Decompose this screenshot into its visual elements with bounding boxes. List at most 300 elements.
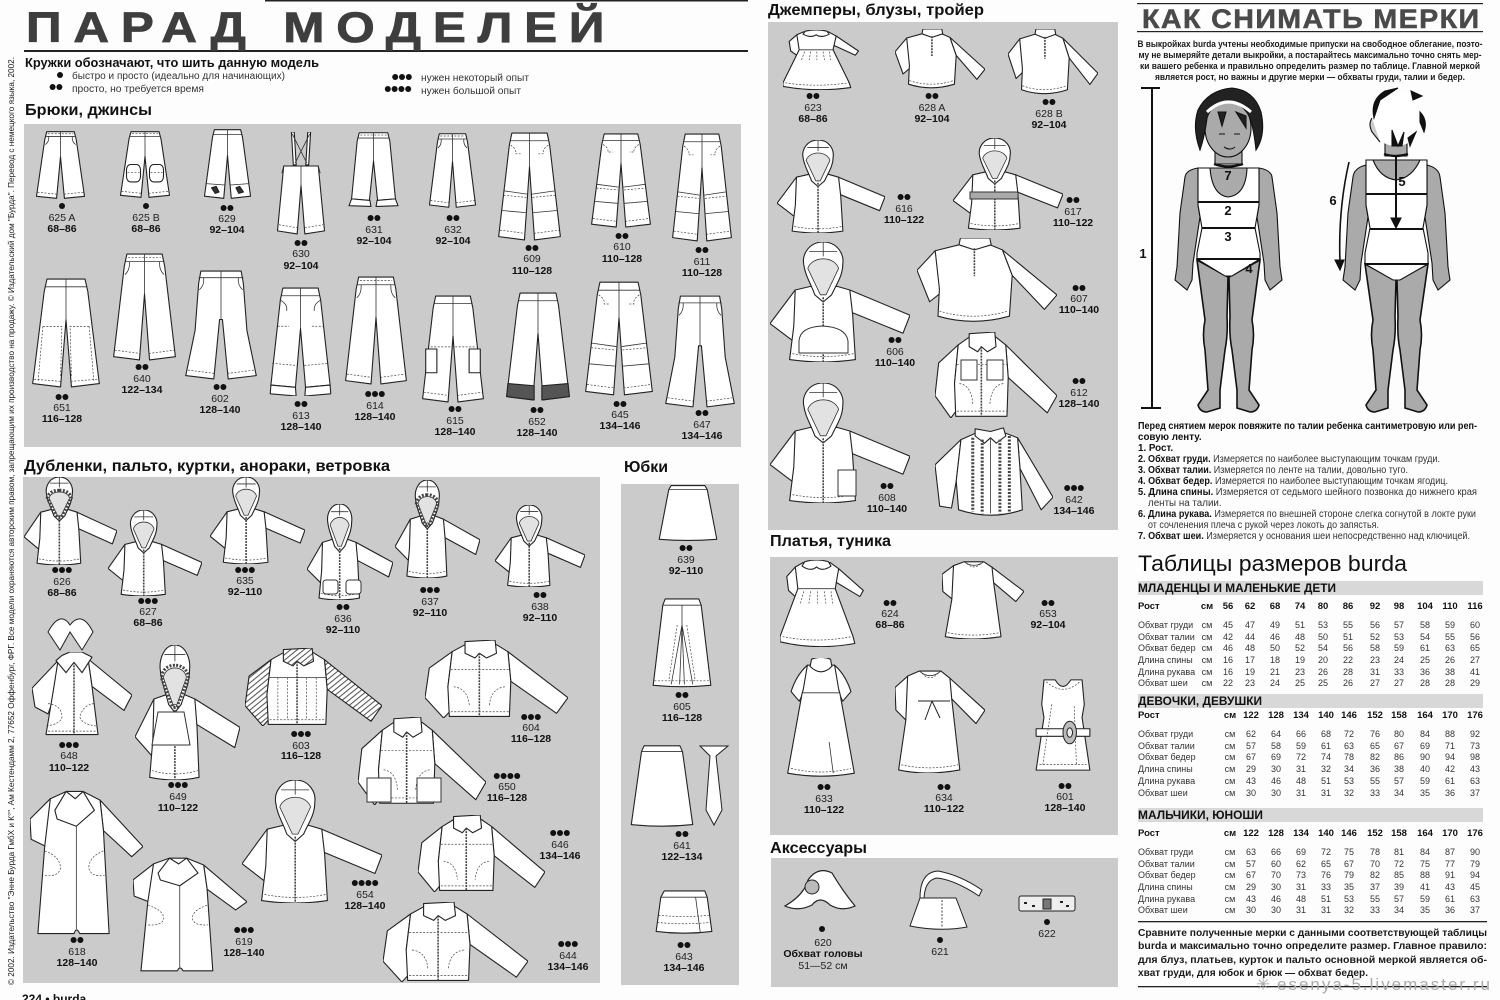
table: boys: 82 — [1370, 870, 1380, 880]
garment 608: 608 — [878, 492, 896, 504]
garment 631 — [349, 133, 398, 247]
measuring instructions: 5. Длина спины. Измеряется от седьмого шейного позвонка до нижнего края — [1138, 487, 1477, 498]
closing note — [1138, 921, 1488, 987]
table: boys: 77 — [1445, 859, 1455, 869]
table: infants and small children: 27 — [1394, 678, 1404, 688]
table: infants and small children: 26 — [1318, 667, 1328, 677]
garment 628 A: 92–104 — [914, 113, 950, 125]
watermark: esenya-5.livemaster.ru — [1277, 975, 1490, 994]
garment 628 B: 628 B — [1035, 108, 1063, 120]
table: girls: Рост — [1138, 710, 1160, 721]
garment 604 — [425, 640, 568, 745]
table: girls: 152 — [1367, 710, 1383, 721]
garment 625 A: 68–86 — [47, 223, 77, 235]
table: infants and small children: 53 — [1394, 632, 1404, 642]
table: girls: 66 — [1296, 729, 1306, 739]
table: girls: Длина спины — [1138, 764, 1193, 774]
garment 605 — [653, 599, 711, 724]
garment 652: 128–140 — [517, 427, 558, 439]
garment 618: 618 — [68, 946, 86, 958]
table: girls: 67 — [1394, 741, 1404, 751]
garment 631: 92–104 — [356, 235, 392, 247]
table: boys: 70 — [1271, 870, 1281, 880]
garment 608: 110–140 — [867, 503, 907, 515]
garment 623 — [783, 30, 858, 125]
table: boys: 78 — [1370, 847, 1380, 857]
garment 603: 116–128 — [281, 750, 321, 762]
garment 625 B: 68–86 — [131, 223, 161, 235]
hat 620: 620 — [814, 937, 832, 949]
intro paragraph: является рост, но важны и другие мерки — обхваты груди, талии и бедер. — [1155, 72, 1465, 83]
table: girls: 68 — [1321, 729, 1331, 739]
table: boys: 63 — [1246, 847, 1256, 857]
garment 646: 646 — [551, 839, 569, 851]
table: boys: 62 — [1296, 859, 1306, 869]
table: boys: 146 — [1341, 828, 1357, 839]
table: infants and small children: 62 — [1245, 601, 1255, 612]
garment 618: 128–140 — [57, 957, 98, 969]
table: girls: 30 — [1271, 788, 1281, 798]
garment 629: 92–104 — [209, 224, 245, 236]
panel: outerwear — [23, 477, 600, 983]
garment 617: 110–122 — [1053, 217, 1093, 229]
table: girls: 158 — [1391, 710, 1407, 721]
measuring instructions: 7. Обхват шеи. Измеряется у основания шеи непосредственно над ключицей. — [1138, 531, 1470, 542]
garment 616 — [777, 140, 924, 233]
table: boys: 79 — [1344, 870, 1354, 880]
table: boys: 65 — [1321, 859, 1331, 869]
bag 621 — [910, 871, 982, 958]
heading: Как снимать мерки: КАК СНИМАТЬ МЕРКИ — [1142, 4, 1479, 34]
garment 605: 116–128 — [662, 712, 702, 724]
table: boys: 122 — [1243, 828, 1259, 839]
garment 641 with tie: 641 — [673, 840, 691, 852]
garment 650 — [358, 717, 527, 805]
table: girls: 74 — [1321, 752, 1331, 762]
garment 625 A — [36, 132, 85, 235]
table: infants and small children: 21 — [1270, 667, 1280, 677]
garment 650: 116–128 — [487, 792, 527, 804]
garment 643 — [656, 891, 712, 974]
table: infants and small children: см — [1202, 678, 1212, 688]
table: infants and small children: 59 — [1445, 620, 1455, 630]
table: boys: 76 — [1321, 870, 1331, 880]
table: boys: 85 — [1394, 870, 1404, 880]
table: girls: 31 — [1321, 788, 1331, 798]
table: boys: 29 — [1246, 882, 1256, 892]
table: boys: 43 — [1445, 882, 1455, 892]
garment 636: 92–110 — [326, 624, 360, 636]
garment 618 — [30, 791, 143, 969]
table: infants and small children: 46 — [1223, 643, 1233, 653]
figure: child back view: 6 — [1329, 193, 1337, 208]
table: infants and small children: 23 — [1245, 678, 1255, 688]
table: girls: 31 — [1296, 788, 1306, 798]
garment 623: 623 — [804, 102, 822, 114]
garment 654: 128–140 — [345, 900, 386, 912]
garment 649: 110–122 — [158, 802, 198, 814]
measuring instructions: 1. Рост. — [1138, 443, 1173, 454]
garment 608 — [770, 383, 910, 515]
measuring instructions — [1138, 421, 1477, 542]
table: infants and small children: 104 — [1417, 601, 1434, 612]
table: girls: 48 — [1296, 776, 1306, 786]
garment 640: 122–134 — [122, 384, 163, 396]
table: infants and small children: 28 — [1420, 678, 1430, 688]
garment 612 — [935, 332, 1100, 418]
table: infants and small children: 57 — [1394, 620, 1404, 630]
table: boys: Длина спины — [1138, 882, 1193, 892]
table: boys: 48 — [1296, 894, 1306, 904]
belt 622: 622 — [1038, 928, 1056, 940]
table: infants and small children: 29 — [1470, 678, 1480, 688]
table: infants and small children: 56 — [1343, 643, 1353, 653]
measuring instructions: 4. Обхват бедер. Измеряется по наиболее выступающим точкам ягодиц. — [1138, 476, 1448, 487]
table: girls: 61 — [1445, 776, 1455, 786]
table: boys: 75 — [1344, 847, 1354, 857]
garment 639: 92–110 — [669, 565, 703, 577]
table: infants and small children: 56 — [1470, 632, 1480, 642]
garment 613: 128–140 — [281, 421, 322, 433]
table: boys: 55 — [1370, 894, 1380, 904]
table: boys: 31 — [1321, 905, 1331, 915]
legend: difficulty dots: нужен некоторый опыт — [421, 73, 529, 84]
table: infants and small children — [1138, 581, 1483, 688]
garment 605: 605 — [673, 701, 691, 713]
closing note: для блуз, платьев, курток и пальто основной меркой является об- — [1138, 954, 1488, 966]
garment 654: 654 — [356, 889, 374, 901]
table: girls: см — [1225, 729, 1235, 739]
figure: child front view: 3 — [1224, 229, 1232, 244]
table: boys: 45 — [1470, 882, 1480, 892]
garment 639: 639 — [677, 554, 695, 566]
table: infants and small children: 28 — [1343, 667, 1353, 677]
table: infants and small children: 25 — [1318, 678, 1328, 688]
bag 621: 621 — [931, 946, 949, 958]
table: girls: 71 — [1445, 741, 1455, 751]
garment 617: 617 — [1064, 206, 1082, 218]
garment 606 — [770, 242, 915, 369]
table: infants and small children: 110 — [1442, 601, 1458, 612]
garment 641 with tie — [631, 746, 728, 863]
table: infants and small children: 24 — [1270, 678, 1280, 688]
table: girls: 140 — [1318, 710, 1334, 721]
figure: child front view: 4 — [1245, 261, 1253, 276]
table: infants and small children: 18 — [1270, 655, 1280, 665]
table: boys: 66 — [1271, 847, 1281, 857]
garment 611: 110–128 — [682, 267, 722, 279]
garment 643: 134–146 — [664, 962, 705, 974]
figure: child front view: 2 — [1224, 203, 1232, 218]
garment 639 — [659, 486, 717, 577]
table: boys: см — [1225, 870, 1235, 880]
table: boys: МАЛЬЧИКИ, ЮНОШИ — [1138, 810, 1263, 822]
table: girls: 170 — [1442, 710, 1458, 721]
table: infants and small children: 27 — [1370, 678, 1380, 688]
height bar: measure 1 — [1139, 88, 1161, 408]
garment 616: 616 — [895, 203, 913, 215]
table: infants and small children: Длина спины — [1138, 655, 1193, 665]
table: boys: 41 — [1420, 882, 1430, 892]
table: girls: 57 — [1246, 741, 1256, 751]
garment 632 — [429, 134, 476, 247]
table: boys: 81 — [1394, 847, 1404, 857]
table: infants and small children: 44 — [1245, 632, 1255, 642]
garment 645 — [586, 282, 652, 432]
table: boys: 37 — [1470, 905, 1480, 915]
closing note: Сравните полученные мерки с данными соответствующей таблицы — [1138, 927, 1487, 939]
garment 636 — [307, 504, 393, 636]
table: girls: 42 — [1445, 764, 1455, 774]
hat 620: 51—52 см — [798, 960, 848, 972]
heading: Аксессуары: Аксессуары — [770, 840, 867, 857]
table: boys: 32 — [1344, 905, 1354, 915]
garment 642: 642 — [1065, 494, 1083, 506]
table: infants and small children: 98 — [1394, 601, 1404, 612]
table: girls: 86 — [1394, 752, 1404, 762]
table: infants and small children: 80 — [1318, 601, 1328, 612]
table: infants and small children: 55 — [1343, 620, 1353, 630]
hat 620: Обхват головы — [783, 948, 863, 960]
table: infants and small children: 50 — [1270, 643, 1280, 653]
garment 647 — [666, 296, 734, 442]
table: infants and small children: МЛАДЕНЦЫ И МАЛЕНЬКИЕ ДЕТИ — [1138, 583, 1336, 595]
table: girls: 76 — [1370, 729, 1380, 739]
table: boys: 39 — [1394, 882, 1404, 892]
garment 607: 607 — [1070, 293, 1088, 305]
garment 613 — [270, 288, 331, 433]
garment 619 — [133, 858, 265, 971]
table: boys: 128 — [1268, 828, 1284, 839]
garment 648 — [32, 619, 132, 774]
garment 626: 626 — [53, 576, 71, 588]
table: infants and small children: см — [1202, 643, 1212, 653]
legend: difficulty dots: нужен большой опыт — [421, 85, 521, 97]
garment 645: 134–146 — [600, 420, 641, 432]
table: boys: 31 — [1296, 905, 1306, 915]
garment 634: 110–122 — [924, 803, 964, 815]
table: girls: 72 — [1344, 729, 1354, 739]
heading: Юбки: Юбки — [624, 459, 668, 476]
table: infants and small children: Длина рукава — [1138, 667, 1195, 677]
table: boys: Длина рукава — [1138, 894, 1195, 904]
table: infants and small children: 36 — [1420, 667, 1430, 677]
table: infants and small children: см — [1202, 655, 1212, 665]
garment 606: 606 — [886, 346, 904, 358]
panel: trousers — [24, 124, 741, 447]
garment 609 — [499, 133, 560, 277]
garment 653: 92–104 — [1030, 619, 1066, 631]
garment 625 B — [120, 132, 170, 235]
garment 628 B: 92–104 — [1031, 119, 1067, 131]
garment 625 B: 625 B — [132, 212, 160, 224]
garment 644: 134–146 — [548, 961, 589, 973]
garment 646 — [418, 815, 581, 892]
table: girls: 36 — [1445, 788, 1455, 798]
table: girls: 63 — [1344, 741, 1354, 751]
garment 644: 644 — [559, 950, 577, 962]
garment 647: 134–146 — [682, 430, 723, 442]
table: girls: 65 — [1370, 741, 1380, 751]
table: girls: Обхват груди — [1138, 729, 1193, 739]
garment 604: 116–128 — [511, 733, 551, 745]
garment 609: 609 — [523, 253, 541, 265]
table: girls: Длина рукава — [1138, 776, 1195, 786]
garment 637: 92–110 — [413, 607, 447, 619]
panel: accessories — [771, 858, 1118, 987]
garment 606: 110–140 — [875, 357, 915, 369]
table: boys: 67 — [1344, 859, 1354, 869]
table: girls: см — [1225, 741, 1235, 751]
panel: jumpers and blouses — [768, 22, 1118, 530]
garment 619: 128–140 — [224, 947, 265, 959]
table: infants and small children: 49 — [1270, 620, 1280, 630]
table: infants and small children: 56 — [1223, 601, 1233, 612]
table: boys: 30 — [1271, 905, 1281, 915]
panel: dresses — [770, 557, 1118, 835]
table: infants and small children: 23 — [1370, 655, 1380, 665]
garment 630: 92–104 — [283, 260, 319, 272]
table: girls: 37 — [1470, 788, 1480, 798]
garment 603 — [245, 648, 382, 762]
table: infants and small children: 42 — [1223, 632, 1233, 642]
figure: child front view: 7 — [1224, 168, 1232, 183]
table: girls: 59 — [1296, 741, 1306, 751]
measuring instructions: Перед снятием мерок повяжите по талии ребенка сантиметровую или реп- — [1138, 421, 1477, 432]
garment 632: 632 — [444, 224, 462, 236]
garment 615: 615 — [446, 415, 464, 427]
table: infants and small children: 60 — [1470, 620, 1480, 630]
watermark: ✳ — [1256, 975, 1270, 994]
table: girls: 34 — [1344, 764, 1354, 774]
garment 641 with tie: 122–134 — [662, 851, 703, 863]
table: girls: 31 — [1296, 764, 1306, 774]
table: girls: 36 — [1370, 764, 1380, 774]
table: girls: 176 — [1467, 710, 1483, 721]
garment 631: 631 — [365, 224, 383, 236]
table: infants and small children: см — [1201, 601, 1213, 612]
legend: difficulty dots: быстро и просто (идеально для начинающих) — [72, 70, 285, 82]
table: girls: 55 — [1370, 776, 1380, 786]
table: boys: 87 — [1445, 847, 1455, 857]
garment 634: 634 — [935, 792, 953, 804]
table: infants and small children: 26 — [1445, 655, 1455, 665]
garment 653 — [942, 562, 1066, 639]
heading: Таблицы размеров burda: Таблицы размеров burda — [1138, 551, 1408, 576]
table: infants and small children: см — [1202, 632, 1212, 642]
table: boys: 31 — [1296, 882, 1306, 892]
heading: Брюки, джинсы: Брюки, джинсы — [25, 102, 152, 119]
table: boys: см — [1225, 859, 1235, 869]
table: girls: 73 — [1470, 741, 1480, 751]
table: infants and small children: см — [1202, 667, 1212, 677]
garment 614 — [346, 277, 406, 423]
table: girls: 43 — [1470, 764, 1480, 774]
garment 603: 603 — [292, 740, 310, 752]
table: girls: 63 — [1470, 776, 1480, 786]
table: infants and small children: 86 — [1343, 601, 1353, 612]
garment 646: 134–146 — [540, 850, 581, 862]
table: boys: 30 — [1246, 905, 1256, 915]
garment 607: 110–140 — [1059, 304, 1099, 316]
garment 647: 647 — [693, 419, 711, 431]
table: infants and small children: 92 — [1370, 601, 1380, 612]
table: boys: 57 — [1394, 894, 1404, 904]
table: infants and small children: Обхват бедер — [1138, 643, 1196, 653]
garment 623: 68–86 — [798, 113, 828, 125]
table: girls: ДЕВОЧКИ, ДЕВУШКИ — [1138, 696, 1262, 708]
table: boys: 90 — [1470, 847, 1480, 857]
table: boys: 91 — [1445, 870, 1455, 880]
table: girls: 67 — [1246, 752, 1256, 762]
table: boys: 69 — [1296, 847, 1306, 857]
garment 609: 110–128 — [512, 265, 552, 277]
garment 640: 640 — [133, 373, 151, 385]
garment 645: 645 — [611, 409, 629, 421]
legend: difficulty dots: Кружки обозначают, что шить данную модель — [25, 56, 319, 70]
table: boys: см — [1225, 894, 1235, 904]
table: boys: 34 — [1394, 905, 1404, 915]
table: infants and small children: 48 — [1245, 643, 1255, 653]
table: infants and small children: 58 — [1370, 643, 1380, 653]
table: infants and small children: 52 — [1295, 643, 1305, 653]
table: boys: 158 — [1391, 828, 1407, 839]
garment 628 A: 628 A — [919, 102, 945, 114]
table: boys: 30 — [1271, 882, 1281, 892]
table: infants and small children: 58 — [1420, 620, 1430, 630]
garment 610: 110–128 — [602, 253, 642, 265]
table: boys: 140 — [1318, 828, 1334, 839]
table: boys: Рост — [1138, 828, 1160, 839]
garment 602 — [186, 271, 256, 416]
garment 638: 92–110 — [523, 612, 557, 624]
table: girls: 29 — [1246, 764, 1256, 774]
table: infants and small children: 16 — [1223, 667, 1233, 677]
measuring instructions: 2. Обхват груди. Измеряется по наиболее выступающим точкам груди. — [1138, 454, 1440, 465]
table: girls: 61 — [1321, 741, 1331, 751]
table: boys: 170 — [1442, 828, 1458, 839]
intro paragraph — [1138, 39, 1482, 83]
garment 637: 637 — [421, 596, 439, 608]
garment 638 — [495, 505, 585, 624]
garment 649 — [135, 645, 240, 814]
table: girls: 80 — [1394, 729, 1404, 739]
garment 633: 110–122 — [804, 804, 844, 816]
table: boys: 33 — [1370, 905, 1380, 915]
table: girls: 98 — [1470, 752, 1480, 762]
heading: outerwear: Дубленки, пальто, куртки, анораки, ветровка — [24, 458, 390, 475]
table: infants and small children: 31 — [1370, 667, 1380, 677]
table: boys: 88 — [1420, 870, 1430, 880]
table: infants and small children: 24 — [1394, 655, 1404, 665]
garment 640 — [114, 254, 175, 396]
garment 602: 602 — [211, 393, 229, 405]
garment 650: 650 — [498, 781, 516, 793]
table: girls: 30 — [1271, 764, 1281, 774]
table: infants and small children: 22 — [1223, 678, 1233, 688]
garment 627: 68–86 — [133, 617, 163, 629]
table: girls: 164 — [1417, 710, 1434, 721]
table: girls: 64 — [1271, 729, 1281, 739]
table: girls: 30 — [1246, 788, 1256, 798]
table: infants and small children: Обхват талии — [1138, 632, 1195, 642]
table: boys — [1138, 808, 1483, 915]
garment 634 — [895, 671, 985, 815]
table: boys: 36 — [1445, 905, 1455, 915]
table: infants and small children: 63 — [1445, 643, 1455, 653]
table: boys: см — [1224, 828, 1236, 839]
table: girls: 82 — [1370, 752, 1380, 762]
